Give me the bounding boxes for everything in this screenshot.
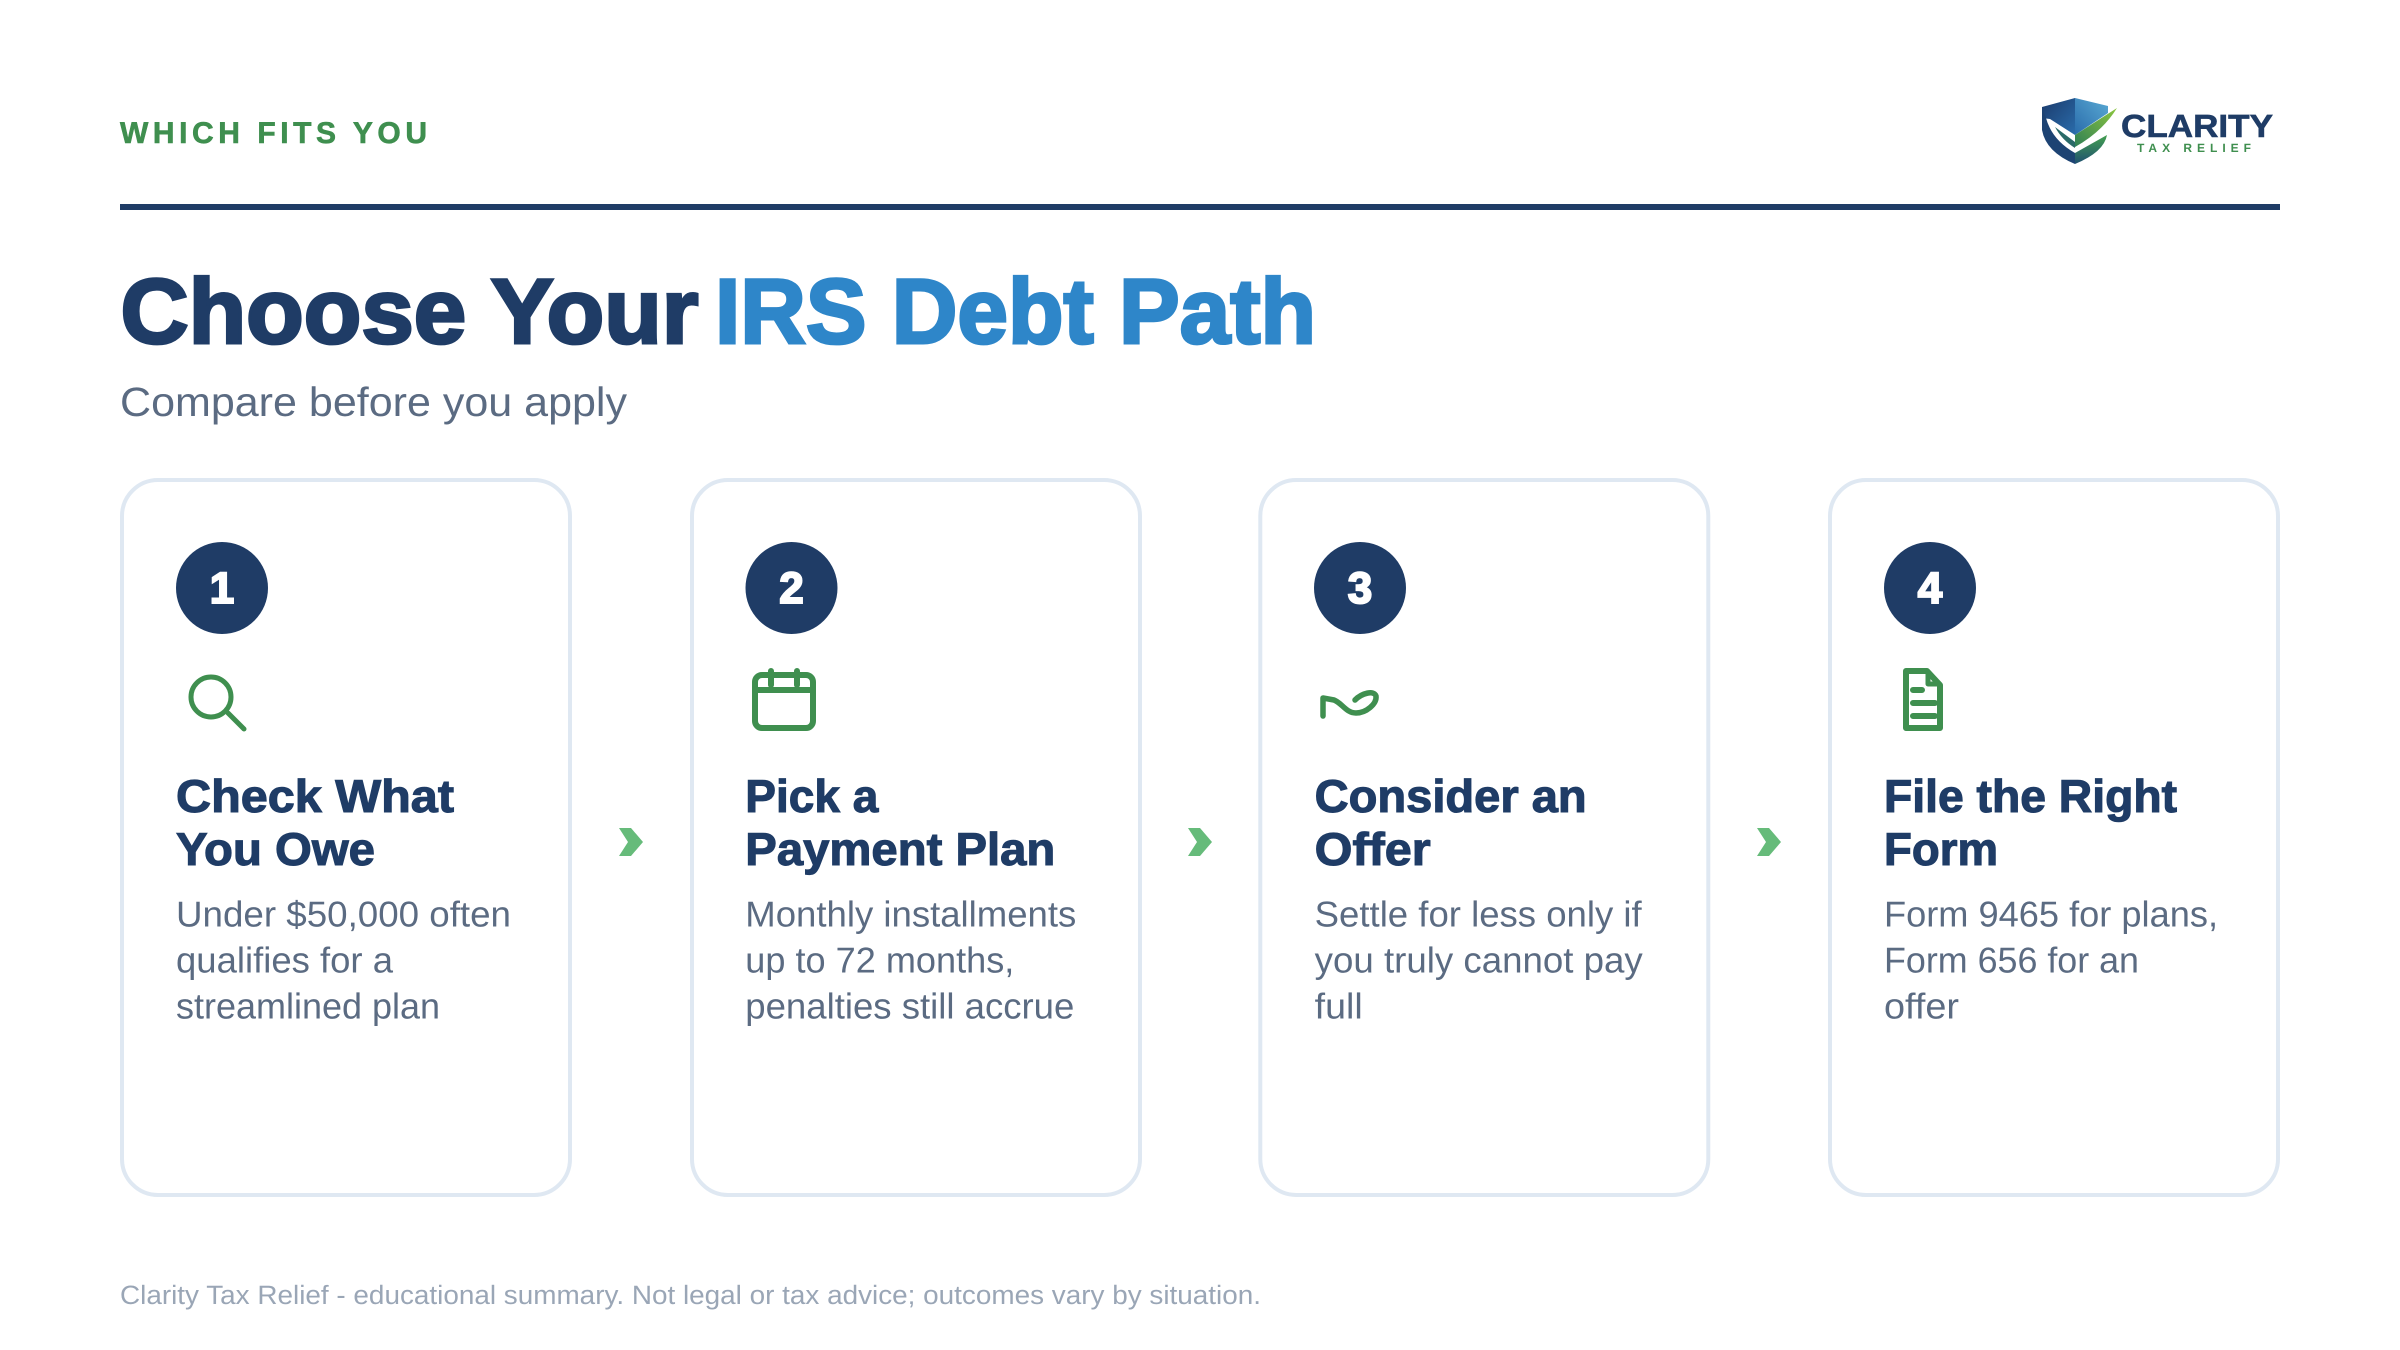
step 1 description: Under $50,000 often [176, 894, 511, 934]
step 2 description [745, 894, 1076, 1026]
subtitle: Compare before you apply [120, 379, 628, 425]
step 2 description: Monthly installments [745, 894, 1076, 934]
step 1 heading [176, 770, 454, 875]
step 4 description [1884, 894, 2218, 1026]
step 4 description: Form 9465 for plans, [1884, 894, 2218, 934]
logo wordmark: CLARITY [2121, 108, 2273, 144]
step 1 heading: You Owe [176, 823, 375, 875]
panel: step 1 check what you owe [122, 480, 570, 1195]
title: IRS Debt Path [715, 261, 1316, 363]
step 3 description: you truly cannot pay [1315, 940, 1643, 980]
step 2 heading: Payment Plan [745, 823, 1055, 875]
step 4 description: Form 656 for an [1884, 940, 2139, 980]
step 3 description [1315, 894, 1643, 1026]
icon: shield with check [2042, 98, 2117, 164]
kicker label: WHICH FITS YOU [120, 117, 427, 150]
step number 2: 2 [779, 564, 804, 613]
icon: magnifying glass [191, 677, 244, 729]
step number 1: 1 [210, 564, 234, 613]
step number 4 [1884, 542, 1976, 634]
footer disclaimer: Clarity Tax Relief - educational summary. Not legal or tax advice; outcomes vary by situation. [120, 1280, 1261, 1310]
step 3 description: full [1315, 986, 1363, 1026]
arrow 3 to 4 [1757, 828, 1781, 856]
icon: calendar [755, 671, 813, 728]
step 4 heading: Form [1884, 823, 1998, 875]
step number 1 [176, 542, 268, 634]
title: Choose Your [120, 261, 698, 363]
step 4 heading: File the Right [1884, 770, 2177, 822]
panel: step 3 consider an offer [1260, 480, 1708, 1195]
logo tagline: TAX RELIEF [2137, 141, 2251, 155]
step 4 heading [1884, 770, 2177, 875]
step 2 description: up to 72 months, [745, 940, 1014, 980]
step 2 description: penalties still accrue [745, 986, 1074, 1026]
panel: step 4 file the right form [1830, 480, 2278, 1195]
step 2 heading: Pick a [745, 770, 879, 822]
panel: step 2 pick a payment plan [692, 480, 1140, 1195]
step 3 heading: Offer [1315, 823, 1431, 875]
icon: handshake squiggle [1323, 693, 1376, 716]
arrow 1 to 2 [619, 828, 643, 856]
step 3 description: Settle for less only if [1315, 894, 1643, 934]
arrow 2 to 3 [1188, 828, 1212, 856]
step number 3: 3 [1348, 564, 1372, 613]
step 1 heading: Check What [176, 770, 454, 822]
step 3 heading [1315, 770, 1587, 875]
step 3 heading: Consider an [1315, 770, 1587, 822]
step 2 heading [745, 770, 1055, 875]
step 1 description [176, 894, 511, 1026]
step 1 description: streamlined plan [176, 986, 440, 1026]
step number 2 [746, 542, 838, 634]
logo: Clarity Tax Relief [2042, 98, 2273, 164]
icon: document [1906, 671, 1940, 728]
step number 3 [1314, 542, 1406, 634]
step number 4: 4 [1918, 564, 1943, 613]
step 4 description: offer [1884, 986, 1959, 1026]
step 1 description: qualifies for a [176, 940, 394, 980]
